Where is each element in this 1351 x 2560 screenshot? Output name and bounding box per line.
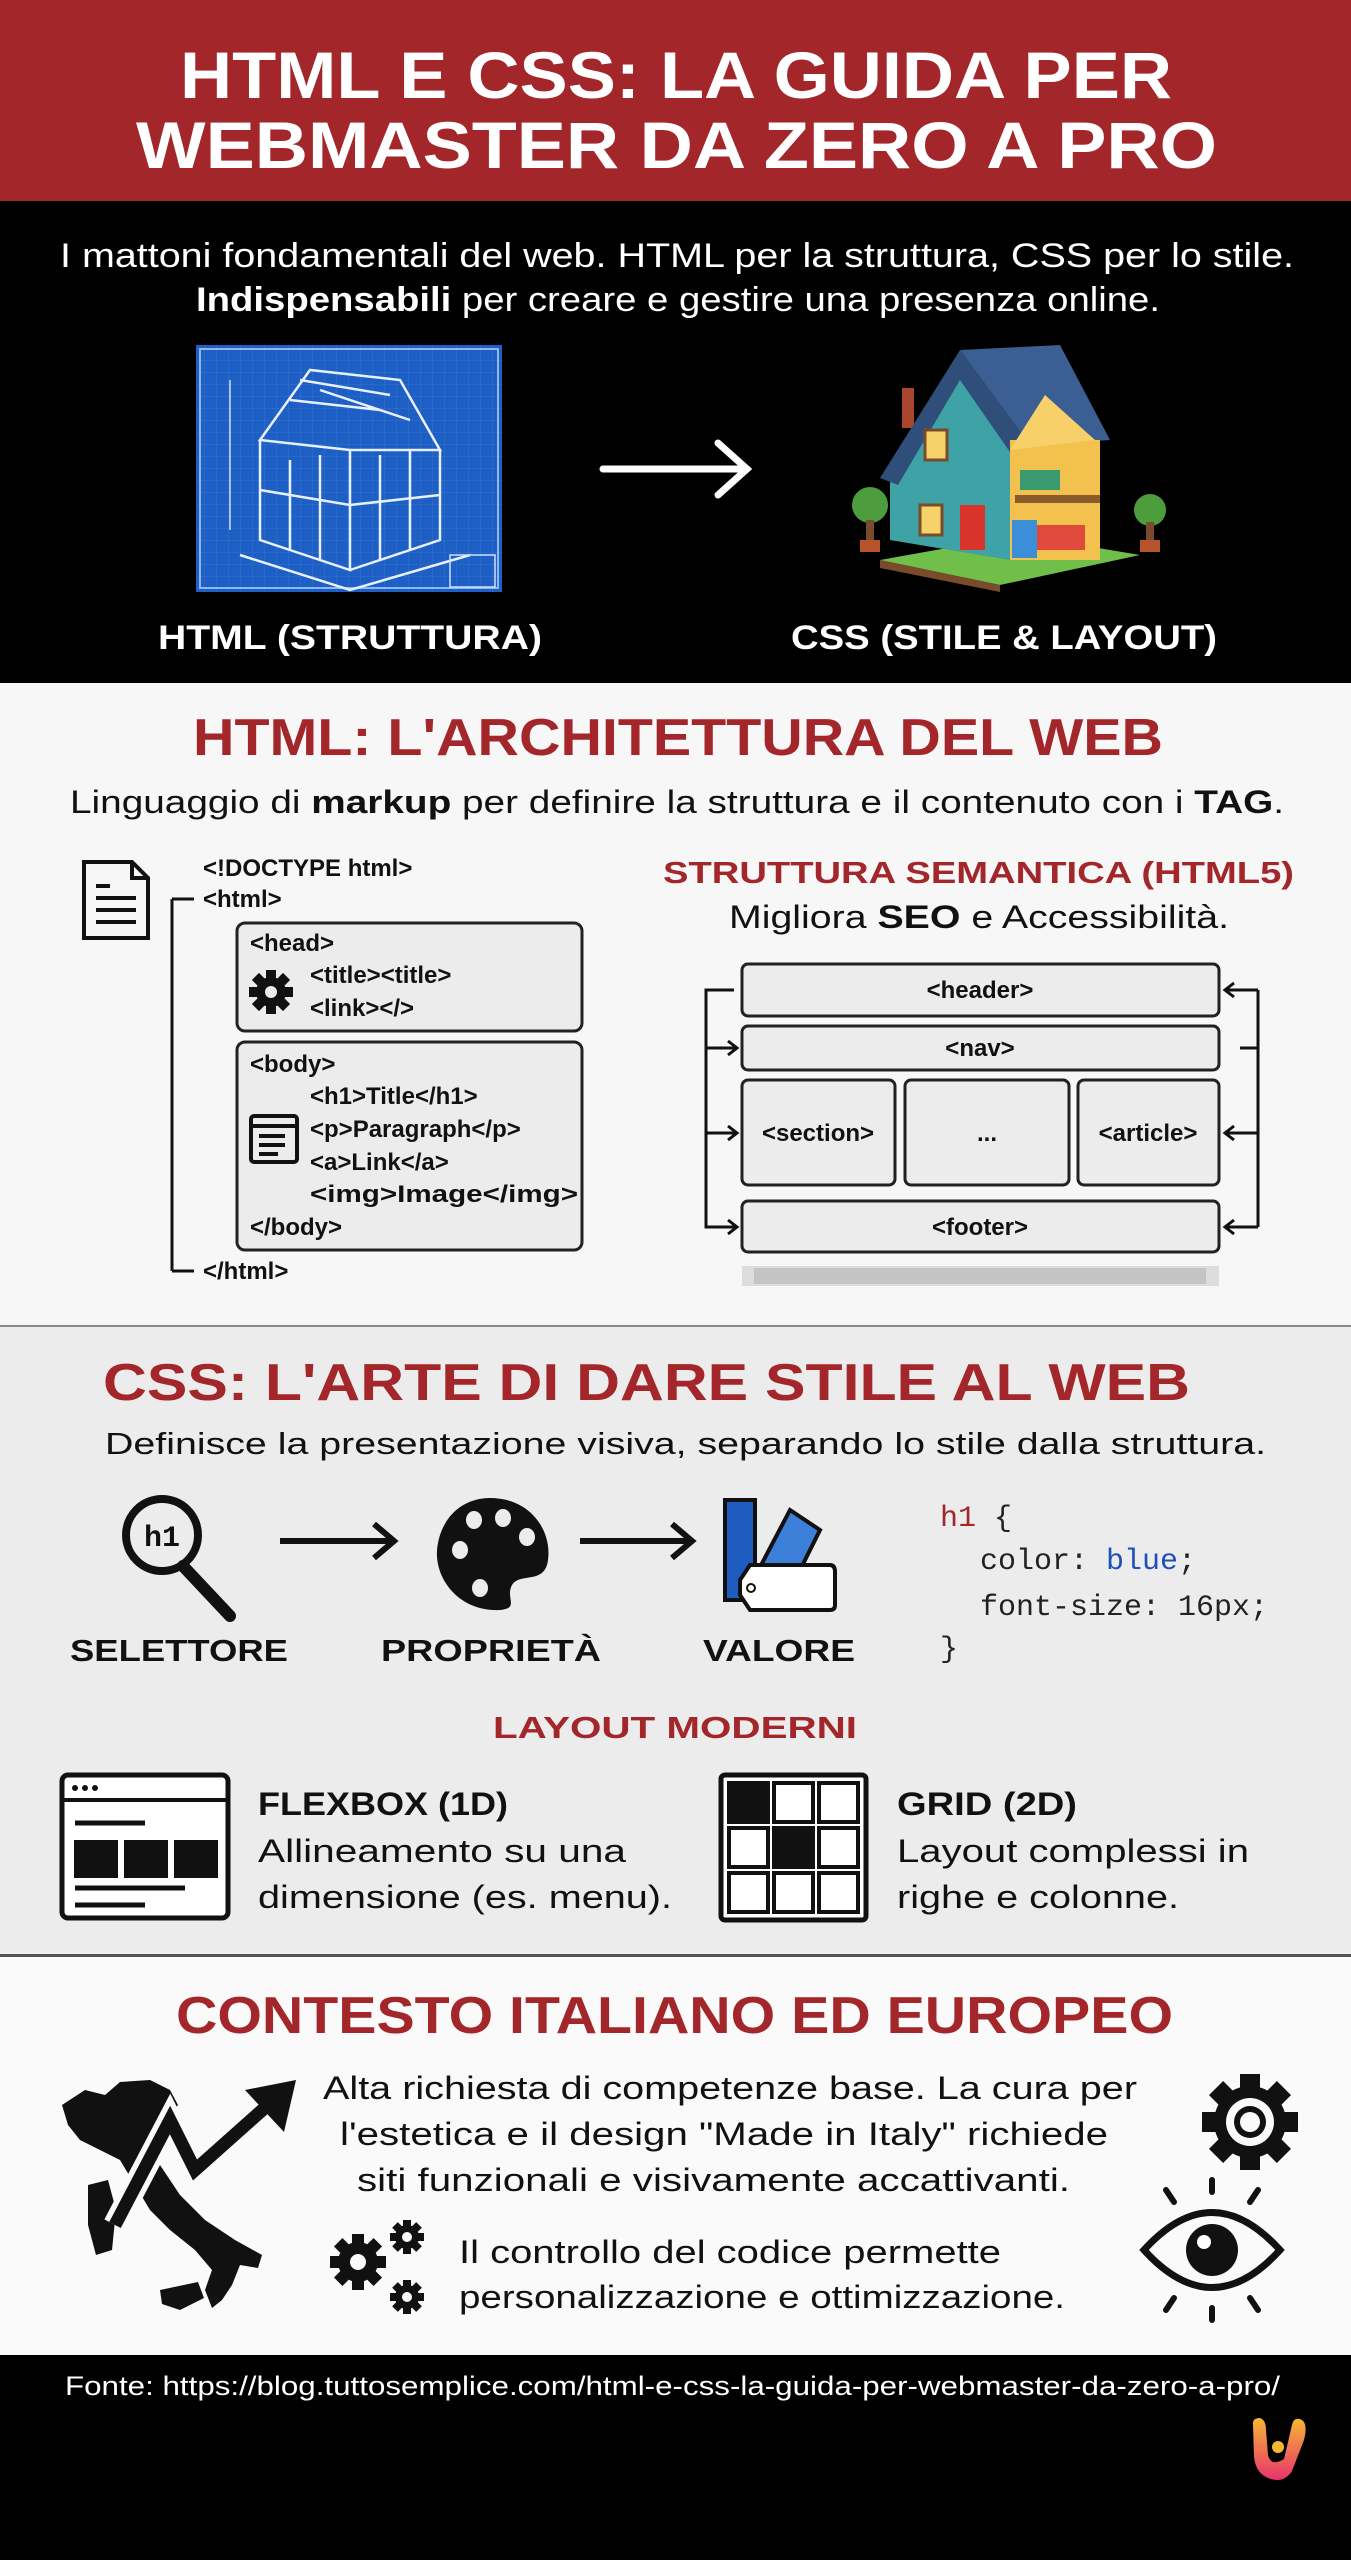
head box — [237, 923, 582, 1031]
intro text: Indispensabili per creare e gestire una presenza online. — [196, 281, 1160, 319]
flexbox card: FLEXBOX (1D) — [258, 1786, 508, 1822]
icon: blueprint house — [196, 345, 502, 592]
body box: <img>Image</img> — [310, 1181, 578, 1208]
icon: eye — [1144, 2180, 1280, 2320]
body box — [237, 1042, 582, 1250]
semantic structure heading — [663, 855, 1294, 935]
contesto paragraph — [323, 2070, 1137, 2198]
code tree: <!DOCTYPE html> — [203, 855, 412, 882]
contesto paragraph: Alta richiesta di competenze base. La cura per — [323, 2070, 1137, 2106]
icon: logo — [1253, 2418, 1306, 2480]
intro text: I mattoni fondamentali del web. HTML per la struttura, CSS per lo stile. — [60, 237, 1294, 275]
semantic layout diagram: <header> — [927, 977, 1033, 1004]
layout moderni heading: LAYOUT MODERNI — [493, 1710, 857, 1745]
css code sample: color: blue; — [980, 1545, 1196, 1579]
head box: <head> — [250, 930, 334, 957]
css code sample: h1 { — [940, 1502, 1012, 1536]
body box: <a>Link</a> — [310, 1149, 449, 1176]
css subtitle: Definisce la presentazione visiva, separando lo stile dalla struttura. — [105, 1426, 1266, 1461]
icon: gear — [249, 970, 293, 1014]
grid card: Layout complessi in — [897, 1833, 1249, 1869]
arrow 1 — [280, 1524, 394, 1558]
flexbox card: dimensione (es. menu). — [258, 1879, 672, 1915]
flexbox card — [62, 1775, 672, 1918]
semantic structure heading: Migliora SEO e Accessibilità. — [729, 899, 1229, 935]
footer source: Fonte: https://blog.tuttosemplice.com/html-e-css-la-guida-per-webmaster-da-zero-a-pro/ — [65, 2371, 1281, 2401]
grid card — [721, 1775, 1249, 1920]
code tree — [84, 855, 582, 1285]
arrow 2 — [580, 1524, 692, 1558]
body box: <p>Paragraph</p> — [310, 1116, 521, 1143]
icon: selector magnifier — [126, 1499, 230, 1616]
icon: styled house — [852, 345, 1166, 592]
icon: palette — [437, 1498, 548, 1610]
body box: <body> — [250, 1051, 335, 1078]
title: HTML E CSS: LA GUIDA PER — [180, 38, 1172, 112]
title — [136, 38, 1217, 182]
arrows: brackets — [706, 983, 1258, 1234]
scrollbar — [742, 1266, 1219, 1286]
labels: html / css: CSS (STILE & LAYOUT) — [791, 619, 1217, 657]
contesto paragraph: siti funzionali e visivamente accattivanti. — [357, 2162, 1070, 2198]
heading: contesto: CONTESTO ITALIANO ED EUROPEO — [176, 1987, 1173, 2045]
head box: <title><title> — [310, 962, 451, 989]
code control text: Il controllo del codice permette — [459, 2234, 1001, 2270]
title: WEBMASTER DA ZERO A PRO — [136, 108, 1217, 182]
flexbox card: Allineamento su una — [258, 1833, 626, 1869]
code tree: <html> — [203, 886, 282, 913]
html subtitle: Linguaggio di markup per definire la struttura e il contenuto con i TAG . — [70, 784, 1284, 820]
code control text: personalizzazione e ottimizzazione. — [459, 2279, 1065, 2315]
code control text — [459, 2234, 1065, 2315]
icon: value swatches — [725, 1500, 835, 1610]
labels: selettore / proprieta / valore — [70, 1633, 855, 1668]
css code sample — [940, 1502, 1268, 1667]
semantic layout diagram: <section> — [762, 1120, 874, 1147]
semantic layout diagram: <footer> — [932, 1214, 1028, 1241]
labels: html / css: HTML (STRUTTURA) — [158, 619, 542, 657]
heading: html: HTML: L'ARCHITETTURA DEL WEB — [193, 709, 1163, 767]
arrow: html to css — [603, 443, 747, 495]
head box: <link></> — [310, 995, 414, 1022]
grid card: righe e colonne. — [897, 1879, 1179, 1915]
icon: italy map with growth arrow — [62, 2080, 296, 2310]
labels: html / css — [158, 619, 1217, 657]
code tree: </html> — [203, 1258, 288, 1285]
labels: selettore / proprieta / valore: VALORE — [703, 1633, 855, 1668]
intro text — [60, 237, 1294, 319]
body box: <h1>Title</h1> — [310, 1083, 478, 1110]
icon: big gear — [1202, 2074, 1298, 2170]
css code sample: } — [940, 1633, 958, 1667]
semantic layout diagram: <nav> — [945, 1035, 1015, 1062]
semantic layout diagram: ... — [977, 1120, 997, 1147]
heading: css: CSS: L'ARTE DI DARE STILE AL WEB — [103, 1354, 1190, 1412]
css code sample: font-size: 16px; — [980, 1591, 1268, 1625]
labels: selettore / proprieta / valore: SELETTORE — [70, 1633, 288, 1668]
labels: selettore / proprieta / valore: PROPRIETÀ — [381, 1633, 601, 1668]
contesto paragraph: l'estetica e il design "Made in Italy" richiede — [340, 2116, 1108, 2152]
icon: browser window — [251, 1116, 297, 1162]
icon: selector magnifier: h1 — [144, 1522, 180, 1556]
icon: small gears — [330, 2220, 424, 2314]
semantic structure heading: STRUTTURA SEMANTICA (HTML5) — [663, 855, 1294, 890]
grid card: GRID (2D) — [897, 1786, 1077, 1822]
icon: document — [84, 862, 148, 938]
icon: grid — [721, 1775, 866, 1920]
body box: </body> — [250, 1214, 342, 1241]
icon: flexbox — [62, 1775, 228, 1918]
semantic layout diagram: <article> — [1099, 1120, 1197, 1147]
semantic layout diagram — [706, 964, 1258, 1286]
